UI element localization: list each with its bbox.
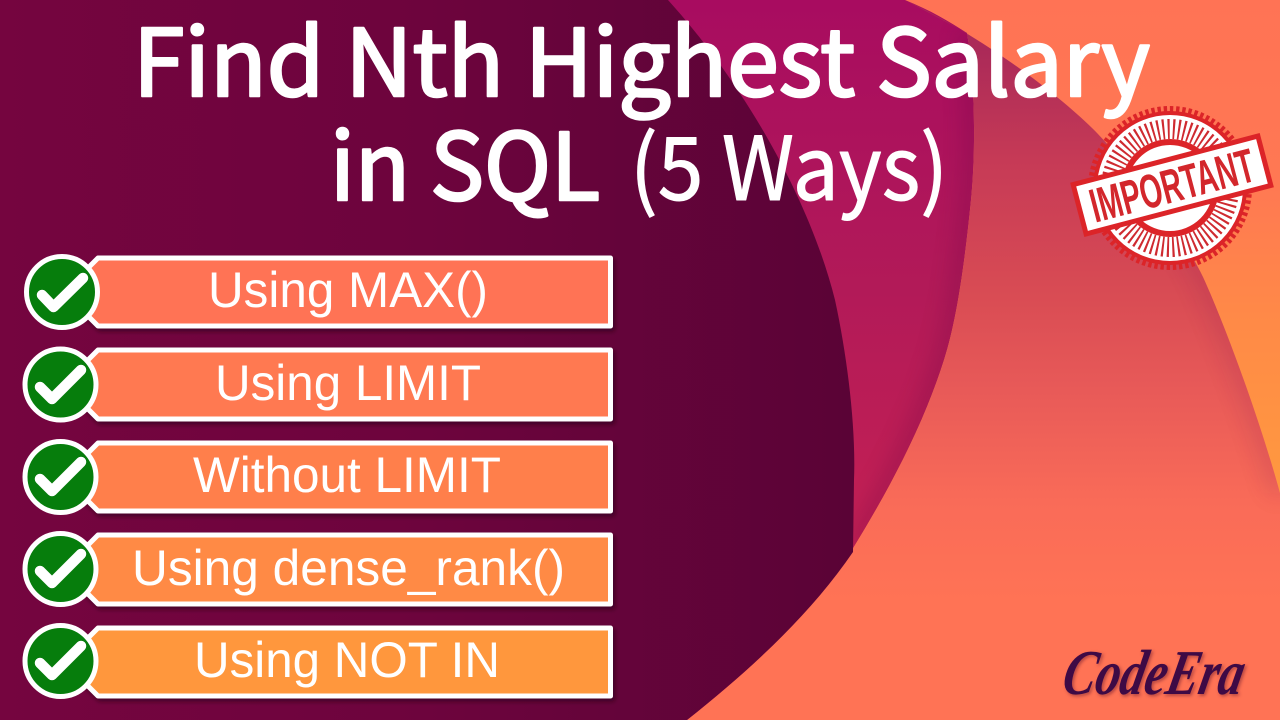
title: in SQL [330, 92, 600, 227]
label text 5: Using NOT IN [194, 632, 500, 688]
label bar 2 [82, 350, 610, 419]
label text 3: Without LIMIT [193, 447, 501, 503]
stamp: IMPORTANT [1070, 109, 1274, 267]
label text 2: Using LIMIT [215, 355, 481, 411]
label bar 5 [82, 628, 610, 696]
option row 2: Using LIMIT [25, 349, 610, 420]
stamp banner [1070, 133, 1274, 237]
check icon 5 [25, 626, 96, 696]
option row 1: Using MAX() [26, 256, 610, 328]
check icon 2 [25, 349, 96, 420]
title: (5 Ways) [630, 99, 948, 226]
option row 5: Using NOT IN [25, 626, 610, 696]
label text 1: Using MAX() [208, 262, 488, 318]
check icon 3 [25, 442, 96, 512]
stamp seal [1091, 109, 1249, 267]
label bar 1 [82, 258, 610, 326]
option row 3: Without LIMIT [25, 442, 610, 512]
label bar 3 [82, 443, 610, 511]
check icon 1 [26, 256, 98, 328]
label text 4: Using dense_rank() [132, 540, 565, 596]
title [133, 0, 1150, 227]
check icon 4 [25, 534, 96, 604]
option row 4: Using dense_rank() [25, 534, 610, 604]
label bar 4 [82, 535, 610, 604]
